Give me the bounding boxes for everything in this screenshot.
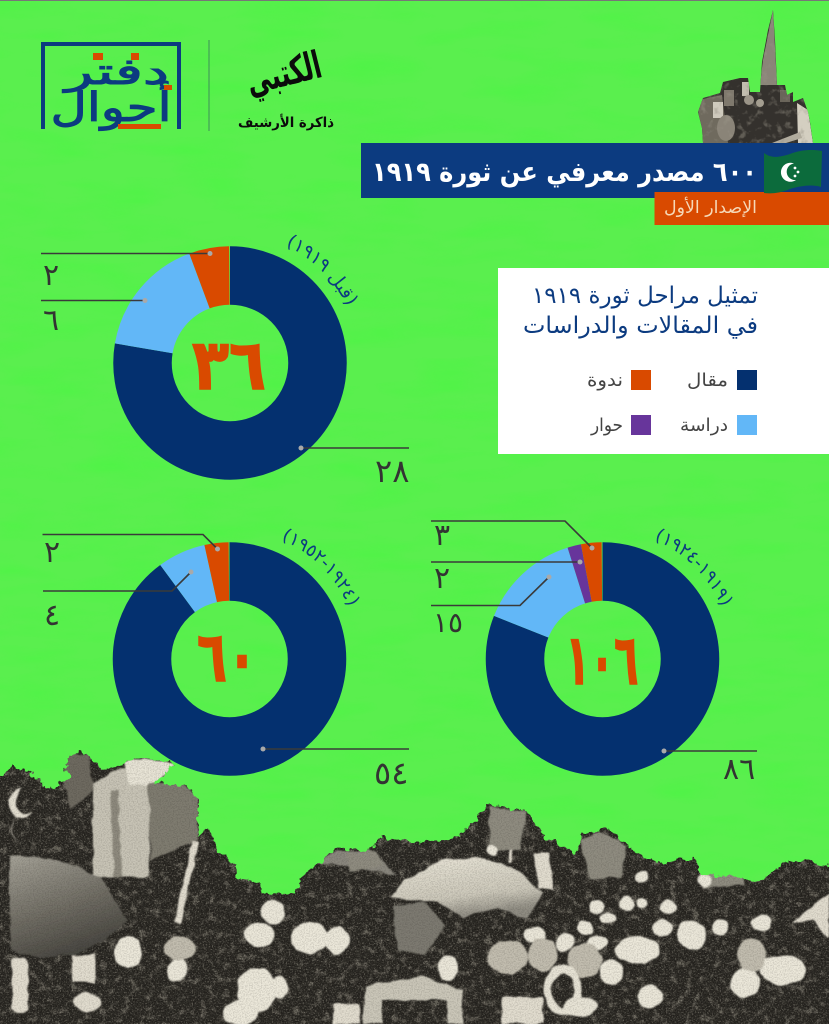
legend heading [523, 283, 758, 339]
logo: al-kotobi [238, 42, 334, 131]
big umbrella [391, 857, 543, 920]
legend item: study: دراسة [680, 415, 728, 436]
curved period label: (قبل ١٩١٩) [288, 234, 358, 304]
crowd highlights [9, 752, 829, 1024]
grey blurred umbrella [10, 855, 127, 958]
fine grain over highlights [0, 740, 829, 1024]
callouts: ٢ [44, 535, 60, 570]
small umbrella [315, 850, 397, 875]
callouts [431, 518, 757, 787]
callouts [41, 251, 409, 490]
chart: 1919-1924 [431, 518, 757, 787]
curved period label: (١٩١٩-١٩٢٤) [656, 528, 732, 604]
logo: al-kotobi: ذاكرة الأرشيف [238, 114, 334, 131]
foreground frame [362, 976, 463, 1024]
callouts: ٦ [43, 303, 59, 338]
legend item: interview [590, 415, 651, 436]
photo: crowd [0, 740, 829, 1024]
sticks and standing cloth [12, 840, 829, 1024]
total: ٣٦ [192, 324, 266, 406]
edition tag: الإصدار الأول [664, 197, 757, 218]
title banner [361, 143, 829, 198]
ring turban [548, 969, 578, 1011]
legend item: article: مقال [687, 370, 728, 391]
legend item: seminar [587, 370, 651, 391]
logo: al-kotobi: الكتبي [242, 42, 326, 104]
total: ٦٠ [197, 616, 257, 698]
legend heading: تمثيل مراحل ثورة ١٩١٩ [532, 283, 758, 309]
title banner: ٦٠٠ مصدر معرفي عن ثورة ١٩١٩ [372, 157, 757, 188]
upper background crowd [345, 806, 745, 888]
callouts: ٣ [434, 518, 450, 553]
callouts: ٢ [434, 561, 450, 596]
callouts: ٨٦ [723, 752, 755, 787]
chart: before 1919 [41, 234, 409, 490]
curved period label: (١٩٢٤-١٩٥٢) [284, 528, 360, 604]
grey-lit turbans [164, 936, 767, 977]
turbans [114, 845, 806, 1024]
figures on the left [9, 752, 198, 877]
photo: revolutionaries with flag [695, 8, 815, 144]
logo: daftar ahwal: دفتر [62, 52, 169, 93]
legend item: article [687, 370, 757, 391]
legend item: interview: حوار [590, 415, 623, 436]
divider [208, 40, 210, 131]
legend heading: في المقالات والدراسات [523, 313, 758, 339]
callouts: ٢٨ [375, 452, 409, 490]
legend item: study [680, 415, 757, 436]
edition tag [654, 192, 829, 225]
callouts [42, 534, 409, 792]
callouts: ١٥ [433, 606, 463, 639]
logo: daftar ahwal: أحوال [50, 81, 172, 131]
callouts: ٥٤ [374, 754, 408, 792]
legend item: seminar: ندوة [587, 370, 623, 391]
callouts: ٤ [44, 598, 60, 633]
panel: legend [498, 268, 829, 454]
logo: daftar ahwal [43, 44, 179, 131]
icon: flag [764, 150, 822, 193]
chart: 1924-1952 [42, 528, 409, 792]
callouts: ٢ [43, 258, 59, 293]
total: ١٠٦ [566, 619, 638, 701]
